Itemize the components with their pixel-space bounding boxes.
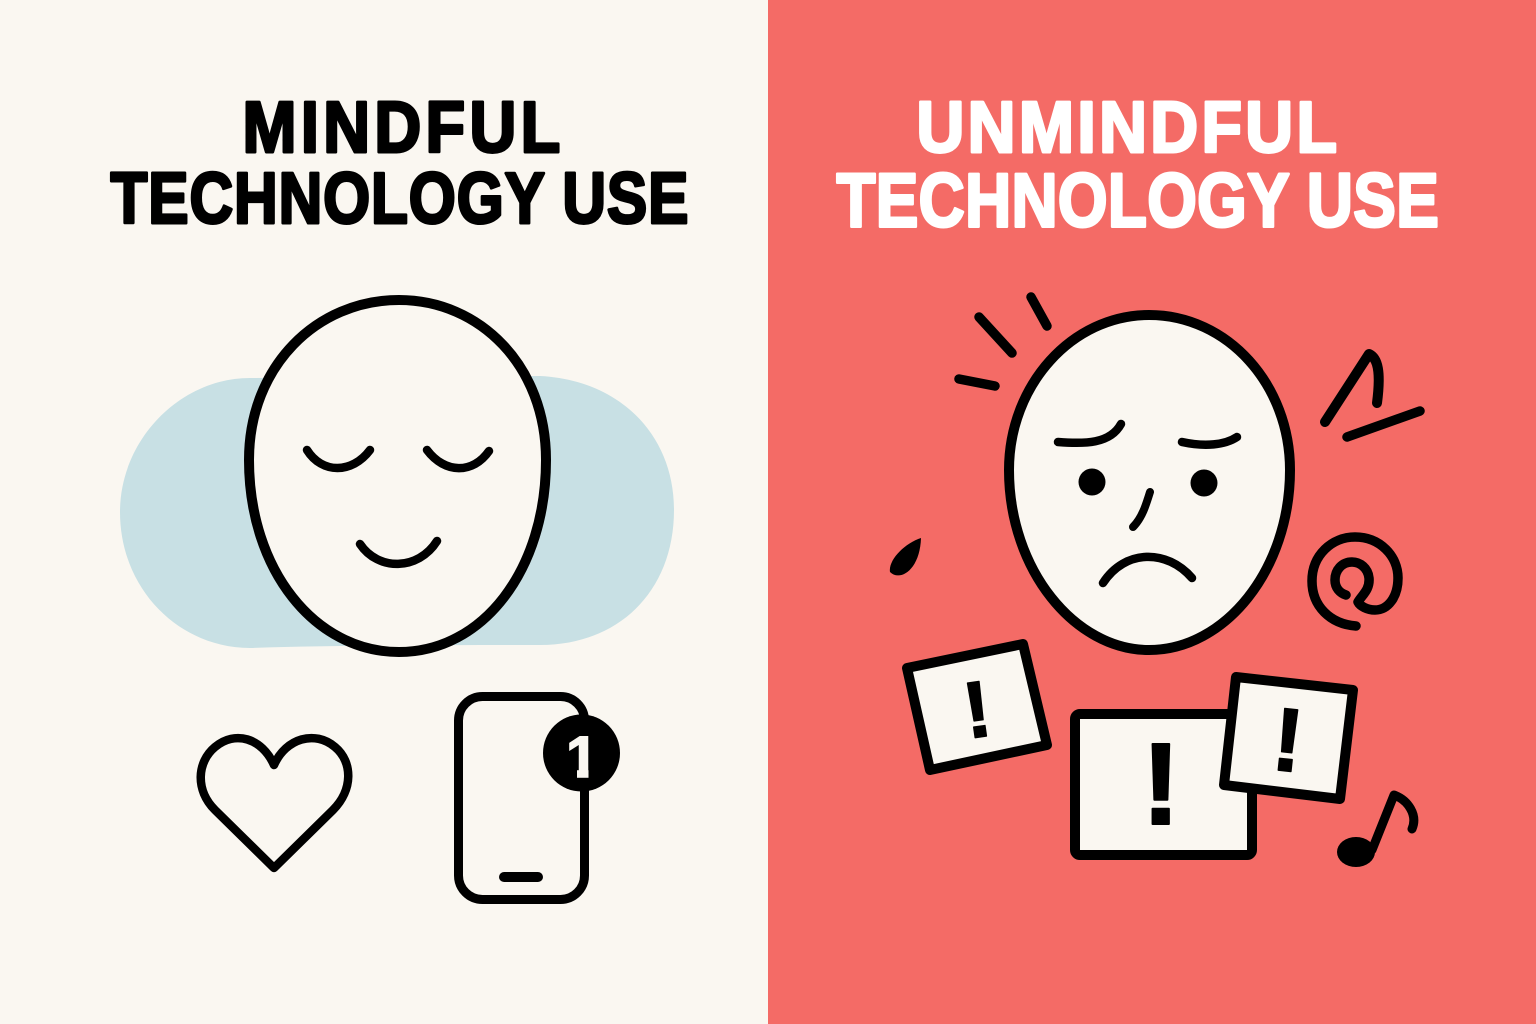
heading: unmindful — [836, 86, 1439, 243]
icon: drop — [890, 538, 921, 575]
panel: unmindful — [768, 0, 1536, 1024]
panel: mindful — [110, 100, 688, 904]
icon: phone with notification — [458, 696, 620, 900]
heading: unmindful: TECHNOLOGY USE — [836, 157, 1439, 243]
heading: unmindful: UNMINDFUL — [916, 86, 1337, 168]
alert card: middle — [1075, 714, 1252, 855]
heading: mindful: MINDFUL — [242, 87, 560, 168]
alert card: right: ! — [1268, 690, 1308, 792]
heading: mindful: TECHNOLOGY USE — [110, 159, 688, 239]
icon: at sign — [1312, 537, 1398, 626]
icon: stressed face — [1009, 315, 1290, 650]
alert card: left: ! — [958, 664, 996, 755]
icon: calm face — [249, 300, 546, 652]
alert card: left — [907, 644, 1047, 770]
icon: heart — [201, 738, 348, 868]
icon: phone with notification: 1 — [566, 725, 598, 790]
heading: mindful — [110, 87, 688, 239]
alert card: right — [1224, 677, 1353, 799]
blue cloud behind face — [120, 376, 674, 648]
icon: music note — [1337, 795, 1414, 867]
alert card: middle: ! — [1142, 719, 1180, 849]
stress marks — [959, 297, 1420, 437]
